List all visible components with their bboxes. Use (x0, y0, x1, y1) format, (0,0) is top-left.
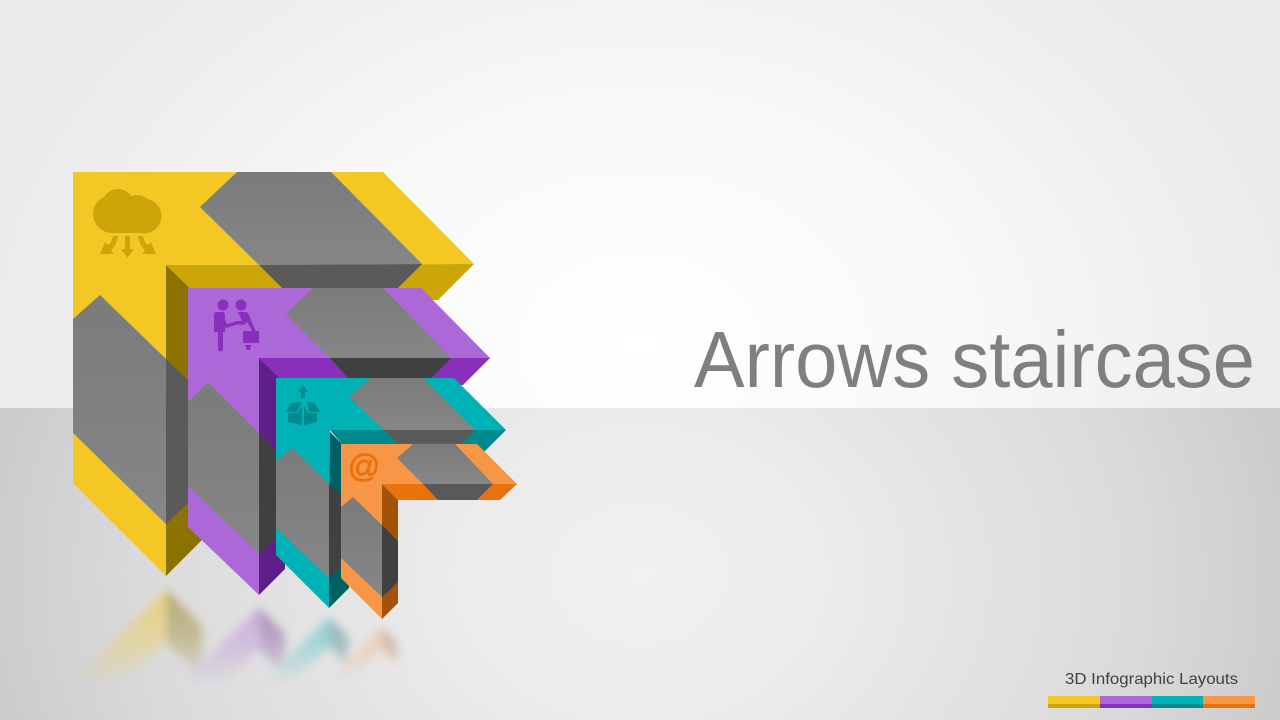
reflection of staircase (83, 586, 402, 680)
footer label: 3D Infographic Layouts (1065, 671, 1238, 688)
footer colour bar (1048, 696, 1255, 708)
arrow step 1: yellow (73, 172, 474, 576)
arrow step 3: teal (276, 378, 506, 608)
title: Arrows staircase (694, 315, 1255, 404)
arrow step 2: purple (188, 288, 490, 595)
background upper wall (0, 0, 1280, 408)
icon: cloud with down arrows (93, 189, 162, 258)
arrow step 4: orange (341, 444, 517, 619)
icon: open box with up arrow (285, 385, 320, 425)
icon: handshake (214, 300, 259, 352)
icon: at sign: @ (348, 448, 380, 484)
background lower floor (0, 408, 1280, 720)
